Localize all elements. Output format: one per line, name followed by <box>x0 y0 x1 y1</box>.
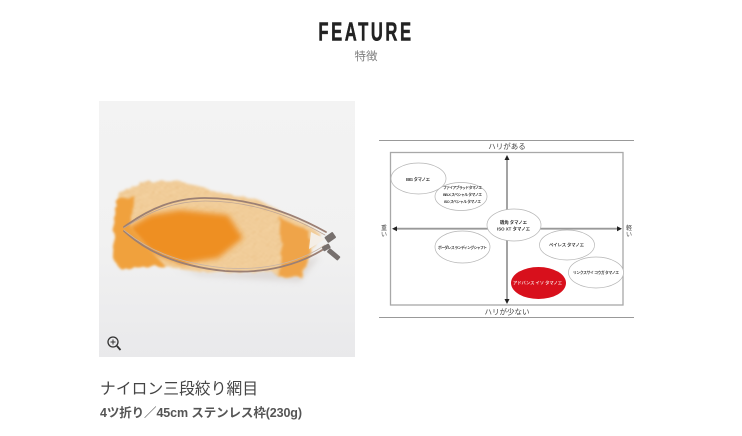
axis label: left: い <box>381 232 387 238</box>
axis label: bottom: ハリが少ない <box>484 306 530 316</box>
bubble: borderless <box>435 231 490 263</box>
bubble: highlighted product: アドバンス イソ タマノエ <box>513 280 562 286</box>
subtitle: 特徴 <box>354 49 378 63</box>
vertical axis arrow <box>504 155 510 304</box>
bubble: borderless: ボーダレス ランディングシャフト <box>438 245 487 250</box>
chart: positioning map <box>379 140 634 318</box>
landing net frame <box>124 198 327 272</box>
caption details: 4ツ折り／45cm ステンレス枠(230g) <box>100 405 302 420</box>
bubble: fire / BB-X / ISO: BB-X スペシャル タマノエ <box>443 192 482 197</box>
net: pale mesh <box>114 180 322 277</box>
bubble: Lynx: リンクスサイ コウガ タマノエ <box>573 270 619 275</box>
bubble: centre: 磯角 タマノエ <box>500 219 528 226</box>
chart bottom rule <box>379 316 634 318</box>
net: left lower fold <box>113 196 165 268</box>
net shadow <box>175 256 320 282</box>
axis label: right: 軽 <box>626 224 632 232</box>
axis label: left: 重 <box>381 224 387 232</box>
bubble: centre <box>487 209 541 241</box>
net: deep orange centre <box>128 210 243 264</box>
icon: zoom magnifier <box>108 337 120 350</box>
bubble: Payless <box>540 230 594 260</box>
bubble: highlighted product <box>511 267 566 299</box>
bubble: BIG: BIG タマノエ <box>406 176 431 183</box>
axis label: right: い <box>626 232 632 238</box>
bubble: Payless: ペイレス タマノエ <box>549 242 585 248</box>
chart frame <box>390 152 623 305</box>
bubble: Lynx <box>568 257 624 288</box>
bubble: fire / BB-X / ISO: ファイアブラッド タマノエ <box>443 185 482 190</box>
title: FEATURE <box>318 17 414 46</box>
frame hinge <box>322 232 341 261</box>
bubble: BIG <box>391 163 446 194</box>
net: right fold <box>279 218 311 277</box>
net: white gap at tip <box>309 232 325 249</box>
axis label: top: ハリがある <box>488 141 526 151</box>
bubble: fire / BB-X / ISO <box>435 182 487 210</box>
caption heading: ナイロン三段絞り網目 <box>100 380 258 398</box>
chart top rule <box>379 140 634 142</box>
panel: product photo <box>99 101 355 357</box>
bubble: fire / BB-X / ISO: ISO スペシャル タマノエ <box>444 199 481 204</box>
horizontal axis arrow <box>392 226 622 231</box>
bubble: centre: ISO XT タマノエ <box>497 226 531 232</box>
